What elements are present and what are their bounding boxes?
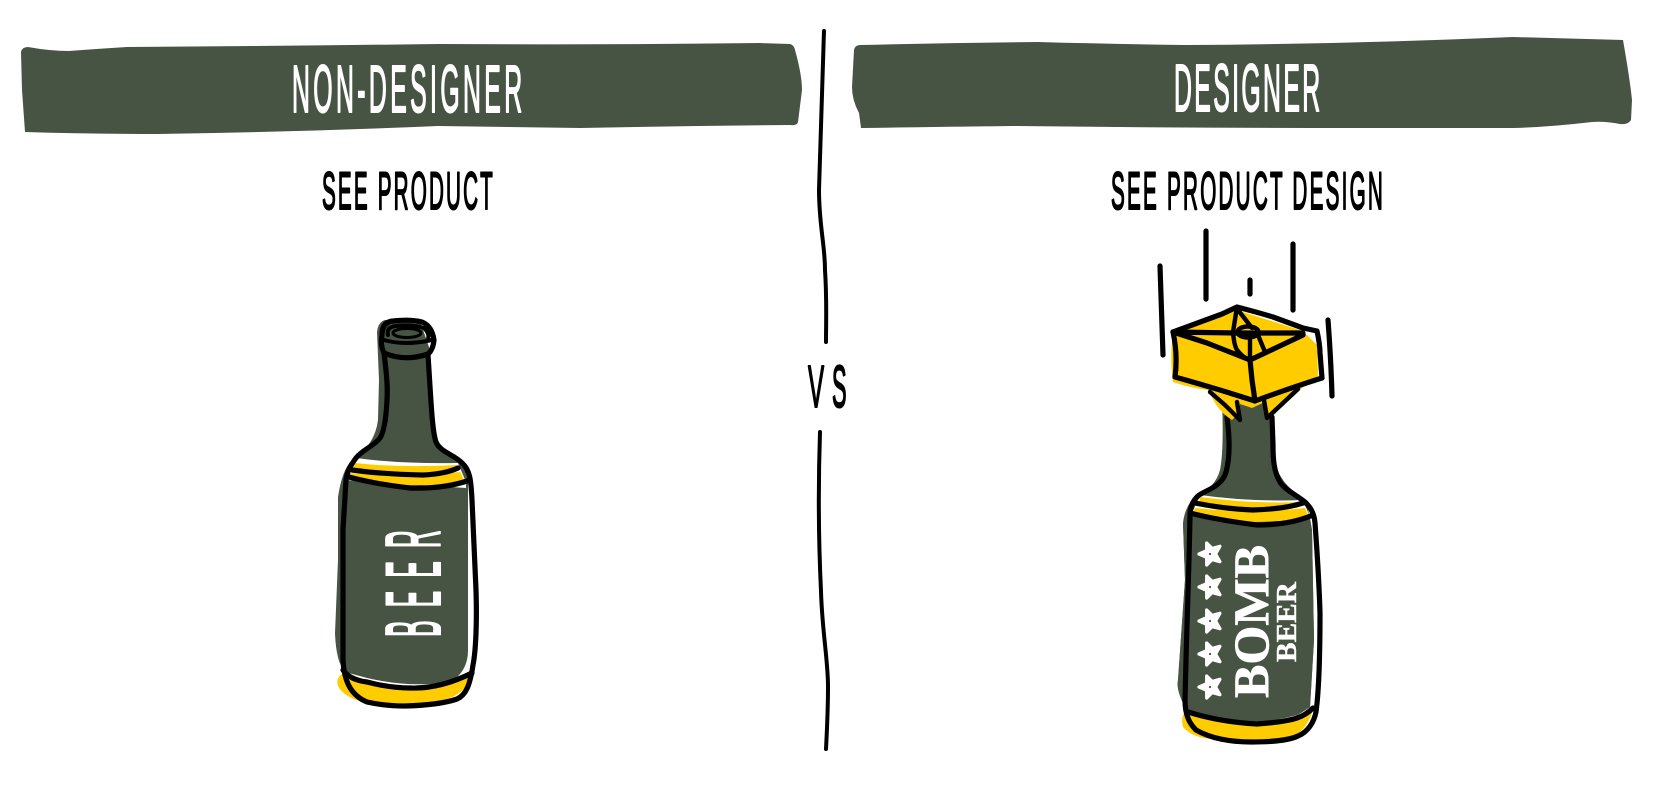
box flaps: [1210, 389, 1298, 420]
bottom line: [1188, 708, 1313, 724]
bottle outline: [343, 353, 476, 706]
star 3: [1199, 610, 1220, 632]
heading: designer: DESIGNER: [1174, 50, 1320, 126]
label band lines: [349, 468, 470, 488]
label text: bomb: BOMB: [1223, 545, 1279, 698]
vs text: S: [832, 355, 847, 420]
falling box: [1171, 307, 1322, 420]
star 2: [1199, 576, 1220, 598]
subheading: see product: SEE PRODUCT: [322, 162, 493, 221]
speed lines: [1160, 231, 1332, 396]
panel: non-designer header: [21, 43, 802, 134]
green label body: [1178, 515, 1314, 722]
bottle body fill: [1178, 400, 1314, 722]
bottle body fill: [335, 320, 468, 684]
star 4: [1199, 643, 1220, 665]
panel: designer header: [852, 37, 1632, 128]
header banner: non-designer: [21, 43, 802, 134]
bottle outline: [1185, 417, 1320, 742]
bottle neck top inside box: [1238, 326, 1258, 338]
heading: non-designer: NON-DESIGNER: [292, 51, 522, 127]
illustration: plain beer bottle: [335, 320, 476, 706]
label stars: [1199, 543, 1220, 698]
vs text: V: [808, 353, 824, 420]
star 5: [1199, 676, 1220, 698]
illustration: bomb beer bottle: [1160, 231, 1332, 742]
divider: vs label with vertical lines: [808, 31, 847, 749]
bottom line: [343, 670, 472, 688]
box yellow fill: [1171, 308, 1318, 420]
yellow bottom band: [1182, 710, 1313, 742]
bottle cap rim: [381, 320, 434, 358]
white highlight and yellow bands: [1190, 495, 1312, 522]
yellow bottom band: [337, 672, 470, 704]
label band lines: [1190, 503, 1313, 525]
label text: beer: BEER: [1271, 581, 1303, 662]
box top edges: [1173, 332, 1303, 401]
subheading: see product design: SEE PRODUCT DESIGN: [1111, 162, 1383, 221]
vs text: [808, 353, 847, 420]
header banner: designer: [852, 37, 1632, 128]
label text: beer: BEER: [371, 530, 458, 637]
star 1: [1199, 543, 1220, 565]
box outline: [1173, 307, 1322, 401]
white highlight and yellow bands: [345, 458, 466, 488]
